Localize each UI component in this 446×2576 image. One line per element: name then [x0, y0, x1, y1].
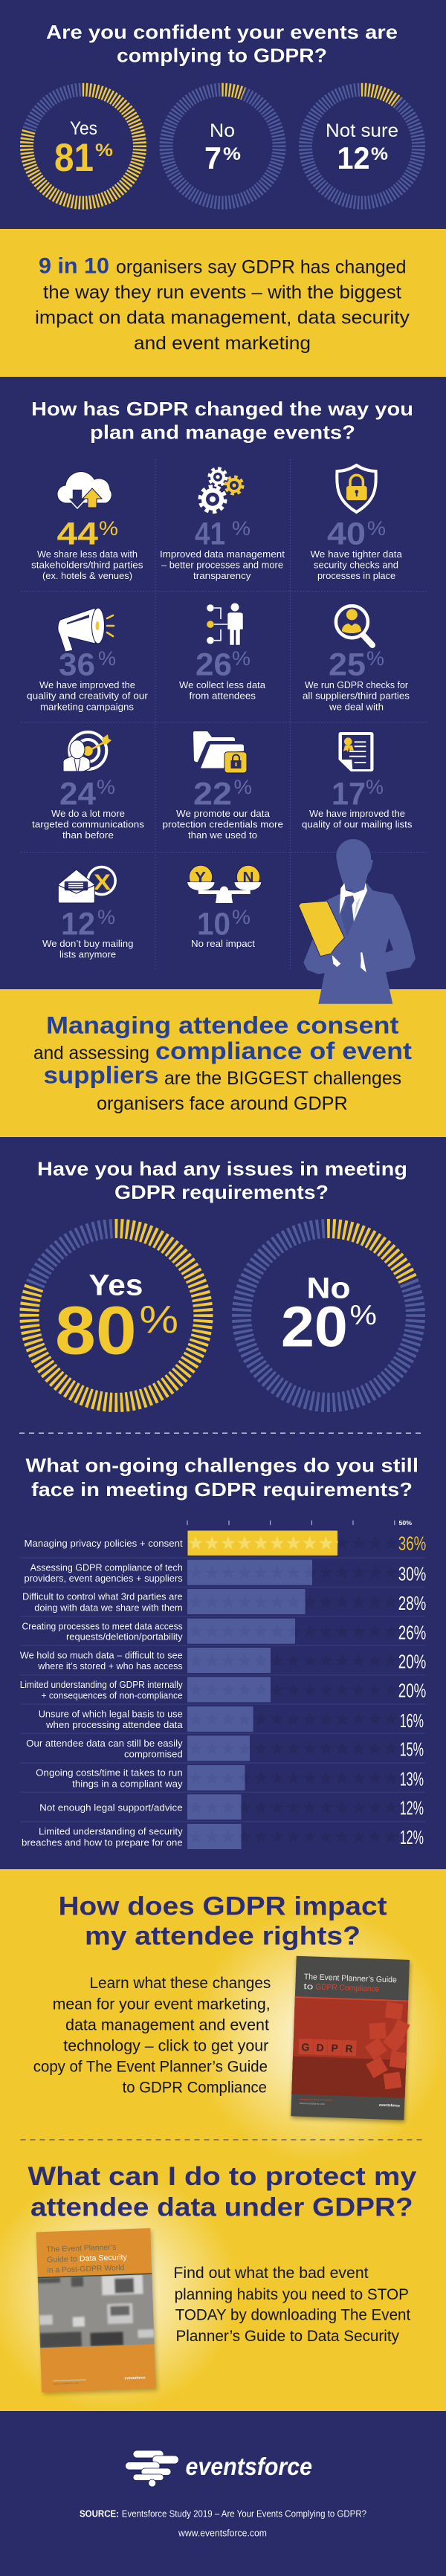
icon: folder with padlock	[193, 731, 247, 773]
stat: 22% data protection credentials: We promote our data	[176, 808, 271, 819]
ring: yes 81%: Yes	[70, 118, 97, 139]
panel: footer	[0, 2411, 446, 2576]
row values: 13%	[400, 1768, 424, 1790]
row labels: Creating processes to meet data access	[22, 1620, 183, 1631]
book cover: guide to data security: Data Security	[80, 2253, 128, 2263]
stat: 36% marketing: 36	[59, 647, 95, 683]
row labels: Assessing GDPR compliance of tech	[30, 1562, 183, 1573]
stat: 25% supplier checks: we deal with	[329, 701, 384, 712]
ring: no 7%: 7	[204, 140, 222, 175]
stat: 10% no real impact: 10	[197, 906, 230, 942]
bar chart: on-going challenges: 50%	[398, 1520, 412, 1527]
row values: 26%	[398, 1622, 426, 1644]
ring: yes 80%: 80	[55, 1293, 137, 1369]
panel: 9 in 10 callout	[0, 229, 446, 377]
heading: issues	[37, 1158, 407, 1203]
stat: 12% no bought lists: 12	[61, 906, 95, 942]
row labels: We hold so much data – difficult to see	[20, 1650, 183, 1661]
stat: 17% mailing list quality: We have improved the	[309, 808, 405, 819]
ring: no 20%: No	[306, 1272, 351, 1305]
source line: SOURCE:	[80, 2508, 119, 2520]
stat: 41% data management	[160, 468, 285, 581]
panel: 9 in 10 callout: the way they run events – with the biggest	[43, 282, 401, 303]
row labels: Unsure of which legal basis to use	[39, 1709, 183, 1720]
stat: 41% data management: %	[232, 517, 251, 540]
icon: certificate document	[339, 732, 373, 771]
ring: yes 80%: Yes	[88, 1269, 143, 1302]
stat: 40% tighter security: security checks and	[314, 559, 398, 570]
ring: no 20%	[240, 1227, 417, 1404]
row labels: + consequences of non-compliance	[42, 1690, 183, 1701]
stat: 24% targeted communications: targeted communications	[32, 819, 145, 830]
heading: how GDPR changed: How has GDPR changed the way you	[31, 398, 413, 420]
ring: no 7%: %	[223, 144, 241, 164]
stat: 25% supplier checks: 25	[329, 647, 366, 683]
row labels: things in a compliant way	[72, 1778, 183, 1789]
stat: 10% no real impact: %	[232, 906, 251, 928]
text: learn what these changes: data management and event	[65, 2016, 269, 2033]
row labels: Not enough legal support/advice	[39, 1802, 183, 1813]
row values: 36%	[398, 1533, 426, 1555]
source line: Eventsforce Study 2019 – Are Your Events Complying to GDPR?	[122, 2508, 366, 2520]
stat: 17% mailing list quality: 17	[332, 776, 366, 812]
row labels: Ongoing costs/time it takes to run	[36, 1767, 183, 1779]
book cover: guide to GDPR compliance: eventsforce	[379, 2103, 400, 2109]
panel: challenges callout: suppliers	[43, 1061, 159, 1088]
heading: confidence: Are you confident your events are	[46, 21, 398, 43]
stat: 41% data management: Improved data management	[160, 548, 285, 560]
book cover: guide to GDPR compliance: G	[301, 2041, 310, 2053]
panel: 9 in 10 callout: 9 in 10	[39, 254, 109, 279]
row labels: Difficult to control what 3rd parties are	[22, 1591, 183, 1602]
book cover: guide to data security: Guide to	[47, 2254, 77, 2265]
heading: attendee rights	[58, 1892, 387, 1951]
stat: 36% marketing	[27, 608, 149, 712]
panel: issues meeting requirements	[0, 1137, 446, 1869]
stat: 36% marketing: quality and creativity of our	[27, 690, 149, 702]
heading: on-going challenges	[25, 1454, 418, 1501]
stat: 22% data protection credentials	[162, 731, 283, 841]
icon: yes/no scales	[187, 865, 262, 903]
heading: issues: GDPR requirements?	[114, 1181, 329, 1203]
heading: protect attendee data: attendee data under GDPR?	[30, 2193, 413, 2222]
heading: protect attendee data: What can I do to protect my	[28, 2162, 417, 2191]
panel: challenges callout	[0, 989, 446, 1137]
stat: 12% no bought lists: %	[97, 906, 115, 928]
row values: 20%	[398, 1680, 426, 1702]
row labels: Limited understanding of GDPR internally	[20, 1679, 183, 1690]
stat: 26% collect less data: from attendees	[189, 690, 256, 702]
text: find out what the bad event: TODAY by downloading The Event	[175, 2307, 410, 2324]
silhouette: business person holding folder	[299, 839, 416, 1004]
row labels	[20, 1538, 183, 1848]
stat: 44% share less data: (ex. hotels & venues)	[42, 570, 132, 581]
row values: 16%	[400, 1709, 424, 1732]
stat: 44% share less data	[31, 472, 143, 581]
row values: 20%	[398, 1650, 426, 1672]
stat: 36% marketing: We have improved the	[39, 679, 135, 690]
text: find out what the bad event: planning habits you need to STOP	[175, 2286, 409, 2303]
row labels: providers, event agencies + suppliers	[24, 1573, 183, 1584]
ring: not sure 12%: %	[371, 144, 388, 164]
icon: person and target	[63, 732, 112, 771]
stat: 44% share less data: 44	[56, 517, 98, 552]
stat: 40% tighter security: %	[367, 517, 386, 540]
book cover: guide to data security: in a Post-GDPR World	[47, 2263, 125, 2275]
icon: cloud with arrows	[57, 472, 112, 508]
ring: no 20%: %	[350, 1300, 377, 1330]
stat: 22% data protection credentials: protection credentials more	[162, 819, 283, 830]
stat: 10% no real impact	[187, 865, 262, 949]
heading: how GDPR changed	[31, 398, 413, 444]
icon: magnifier with person	[336, 606, 372, 645]
row labels: Our attendee data can still be easily	[26, 1738, 183, 1749]
text: find out what the bad event: Planner’s Guide to Data Security	[175, 2328, 399, 2345]
book cover: guide to data security: eventsforce	[124, 2375, 146, 2381]
stat: 26% collect less data: We collect less data	[179, 679, 266, 690]
stat: 22% data protection credentials: 22	[193, 776, 232, 812]
book cover: guide to GDPR compliance: GDPR Compliance	[315, 1983, 380, 1994]
ring: yes 80%: %	[140, 1298, 178, 1342]
icon: gears	[200, 468, 242, 512]
row values	[398, 1533, 426, 1848]
text: learn what these changes: technology – click to get your	[63, 2037, 268, 2054]
book cover: guide to GDPR compliance: www.eventsforce.com	[300, 2102, 325, 2106]
ring: no 7%	[165, 89, 280, 204]
stat: 10% no real impact: No real impact	[191, 938, 255, 949]
panel: how GDPR changed events	[0, 377, 446, 1004]
stat: 25% supplier checks: %	[366, 647, 384, 670]
row labels: requests/deletion/portability	[66, 1631, 183, 1643]
stat: 44% share less data: stakeholders/third parties	[31, 559, 143, 570]
text: learn what these changes: Learn what these changes	[89, 1975, 271, 1992]
icon: envelope with cross: X	[94, 870, 111, 895]
text: find out what the bad event	[173, 2265, 410, 2345]
panel: challenges callout: compliance of event	[155, 1038, 412, 1064]
bar chart: on-going challenges	[20, 1520, 426, 1850]
book cover: guide to data security: www.eventsforce.com	[54, 2382, 79, 2386]
logo: eventsforce: eventsforce	[186, 2453, 312, 2480]
stat: 40% tighter security: processes in place	[317, 570, 395, 581]
stat: 24% targeted communications: %	[97, 776, 115, 798]
book cover: guide to data security	[36, 2228, 158, 2395]
panel: challenges callout: Managing attendee consent	[46, 1012, 399, 1039]
row labels: compromised	[124, 1749, 183, 1760]
stat: 41% data management: – better processes and more	[161, 559, 283, 570]
icon: megaphone	[58, 608, 114, 652]
text: learn what these changes: mean for your event marketing,	[53, 1996, 271, 2013]
row labels: when processing attendee data	[45, 1719, 183, 1730]
row labels: where it’s stored + who has access	[37, 1660, 183, 1672]
stat: 40% tighter security: We have tighter data	[311, 548, 403, 560]
stat: 36% marketing: marketing campaigns	[40, 701, 135, 712]
website: www.eventsforce.com	[178, 2528, 267, 2539]
ring: not sure 12%	[305, 89, 419, 204]
row labels: breaches and how to prepare for one	[22, 1836, 183, 1848]
stat: 17% mailing list quality	[302, 732, 413, 830]
stat: 24% targeted communications: 24	[59, 776, 96, 812]
book cover: guide to GDPR compliance: P	[331, 2042, 338, 2054]
ring: not sure 12%: 12	[337, 140, 370, 175]
ring: yes 81%	[26, 89, 140, 204]
icon: yes/no scales: Y	[195, 870, 207, 886]
ring: yes 81%: 81	[54, 136, 94, 180]
stat: 24% targeted communications: We do a lot more	[51, 808, 125, 819]
stat: 26% collect less data: %	[232, 647, 251, 670]
heading: on-going challenges: face in meeting GDPR requirements?	[31, 1478, 413, 1501]
heading: on-going challenges: What on-going challenges do you still	[25, 1454, 418, 1477]
stat: 40% tighter security	[311, 465, 403, 581]
stat: 36% marketing: %	[98, 647, 116, 670]
book cover: guide to data security: The Event Planner’s	[46, 2243, 117, 2254]
heading: confidence: complying to GDPR?	[117, 45, 327, 67]
panel: challenges callout: organisers face around GDPR	[97, 1093, 348, 1114]
icon: shield with padlock	[337, 465, 376, 512]
stat: 26% collect less data	[179, 603, 266, 702]
panel: challenges callout: are the BIGGEST challenges	[164, 1068, 401, 1089]
row values: 28%	[398, 1592, 426, 1614]
ring: yes 81%: %	[95, 140, 113, 161]
stat: 25% supplier checks: We run GDPR checks for	[305, 679, 409, 690]
stat: 25% supplier checks	[303, 606, 410, 712]
stat: 40% tighter security: 40	[327, 517, 366, 552]
panel: challenges callout: and assessing	[33, 1043, 149, 1064]
panel: 9 in 10 callout: organisers say GDPR has changed	[116, 257, 406, 278]
stat: 44% share less data: We share less data with	[37, 548, 138, 560]
stat: 12% no bought lists: lists anymore	[59, 949, 116, 960]
text: learn what these changes: copy of The Event Planner’s Guide	[33, 2058, 268, 2075]
ring: no 20%: 20	[281, 1295, 348, 1359]
book cover: guide to GDPR compliance: D	[316, 2042, 324, 2054]
heading: how GDPR changed: plan and manage events?	[90, 421, 355, 444]
heading: protect attendee data	[28, 2162, 417, 2222]
ring: not sure 12%: Not sure	[326, 120, 398, 141]
heading: attendee rights: my attendee rights?	[85, 1922, 361, 1951]
row values: 12%	[400, 1826, 424, 1848]
stat: 24% targeted communications: than before	[62, 829, 114, 841]
heading: attendee rights: How does GDPR impact	[58, 1892, 387, 1921]
stat: 26% collect less data: 26	[195, 647, 232, 683]
text: learn what these changes	[33, 1975, 271, 2097]
row labels: doing with data we share with them	[34, 1602, 183, 1613]
panel: confidence	[0, 0, 446, 229]
stat: 41% data management: 41	[195, 517, 225, 552]
row values: 12%	[400, 1797, 424, 1819]
book cover: guide to GDPR compliance	[291, 1956, 410, 2123]
stat: 12% no bought lists: We don’t buy mailing	[42, 938, 134, 949]
text: learn what these changes: to GDPR Compliance	[123, 2080, 267, 2097]
row values: 15%	[400, 1738, 424, 1761]
icon: yes/no scales: N	[242, 870, 254, 886]
stat: 41% data management: transparency	[193, 570, 251, 581]
heading: issues: Have you had any issues in meeting	[37, 1158, 407, 1180]
book cover: guide to GDPR compliance: R	[345, 2042, 353, 2054]
icon: person with data nodes	[207, 603, 243, 645]
text: find out what the bad event: Find out what the bad event	[173, 2265, 369, 2282]
stat: 17% mailing list quality: %	[366, 776, 384, 798]
row values: 30%	[398, 1563, 426, 1585]
stat: 24% targeted communications	[32, 732, 145, 841]
book cover: guide to GDPR compliance: The Event Planner’s Guide	[304, 1973, 397, 1984]
stat: 22% data protection credentials: than we used to	[188, 829, 257, 841]
row labels: Limited understanding of security	[39, 1826, 183, 1837]
stat: 44% share less data: %	[99, 517, 118, 540]
heading: confidence	[46, 21, 398, 67]
ring: yes 80%	[28, 1227, 204, 1404]
logo: eventsforce	[125, 2450, 312, 2487]
row labels: Managing privacy policies + consent	[24, 1538, 183, 1549]
stat: 25% supplier checks: all suppliers/third parties	[303, 690, 410, 702]
stat: 22% data protection credentials: %	[233, 776, 252, 798]
panel: guides	[0, 1869, 446, 2411]
ring: no 7%: No	[210, 120, 235, 141]
panel: 9 in 10 callout: and event marketing	[134, 333, 311, 354]
bars	[187, 1530, 338, 1849]
panel: 9 in 10 callout: impact on data management, data security	[35, 308, 410, 329]
stat: 17% mailing list quality: quality of our mailing lists	[302, 819, 413, 830]
stat: 12% no bought lists	[42, 867, 134, 960]
book cover: guide to GDPR compliance: to	[303, 1982, 314, 1992]
